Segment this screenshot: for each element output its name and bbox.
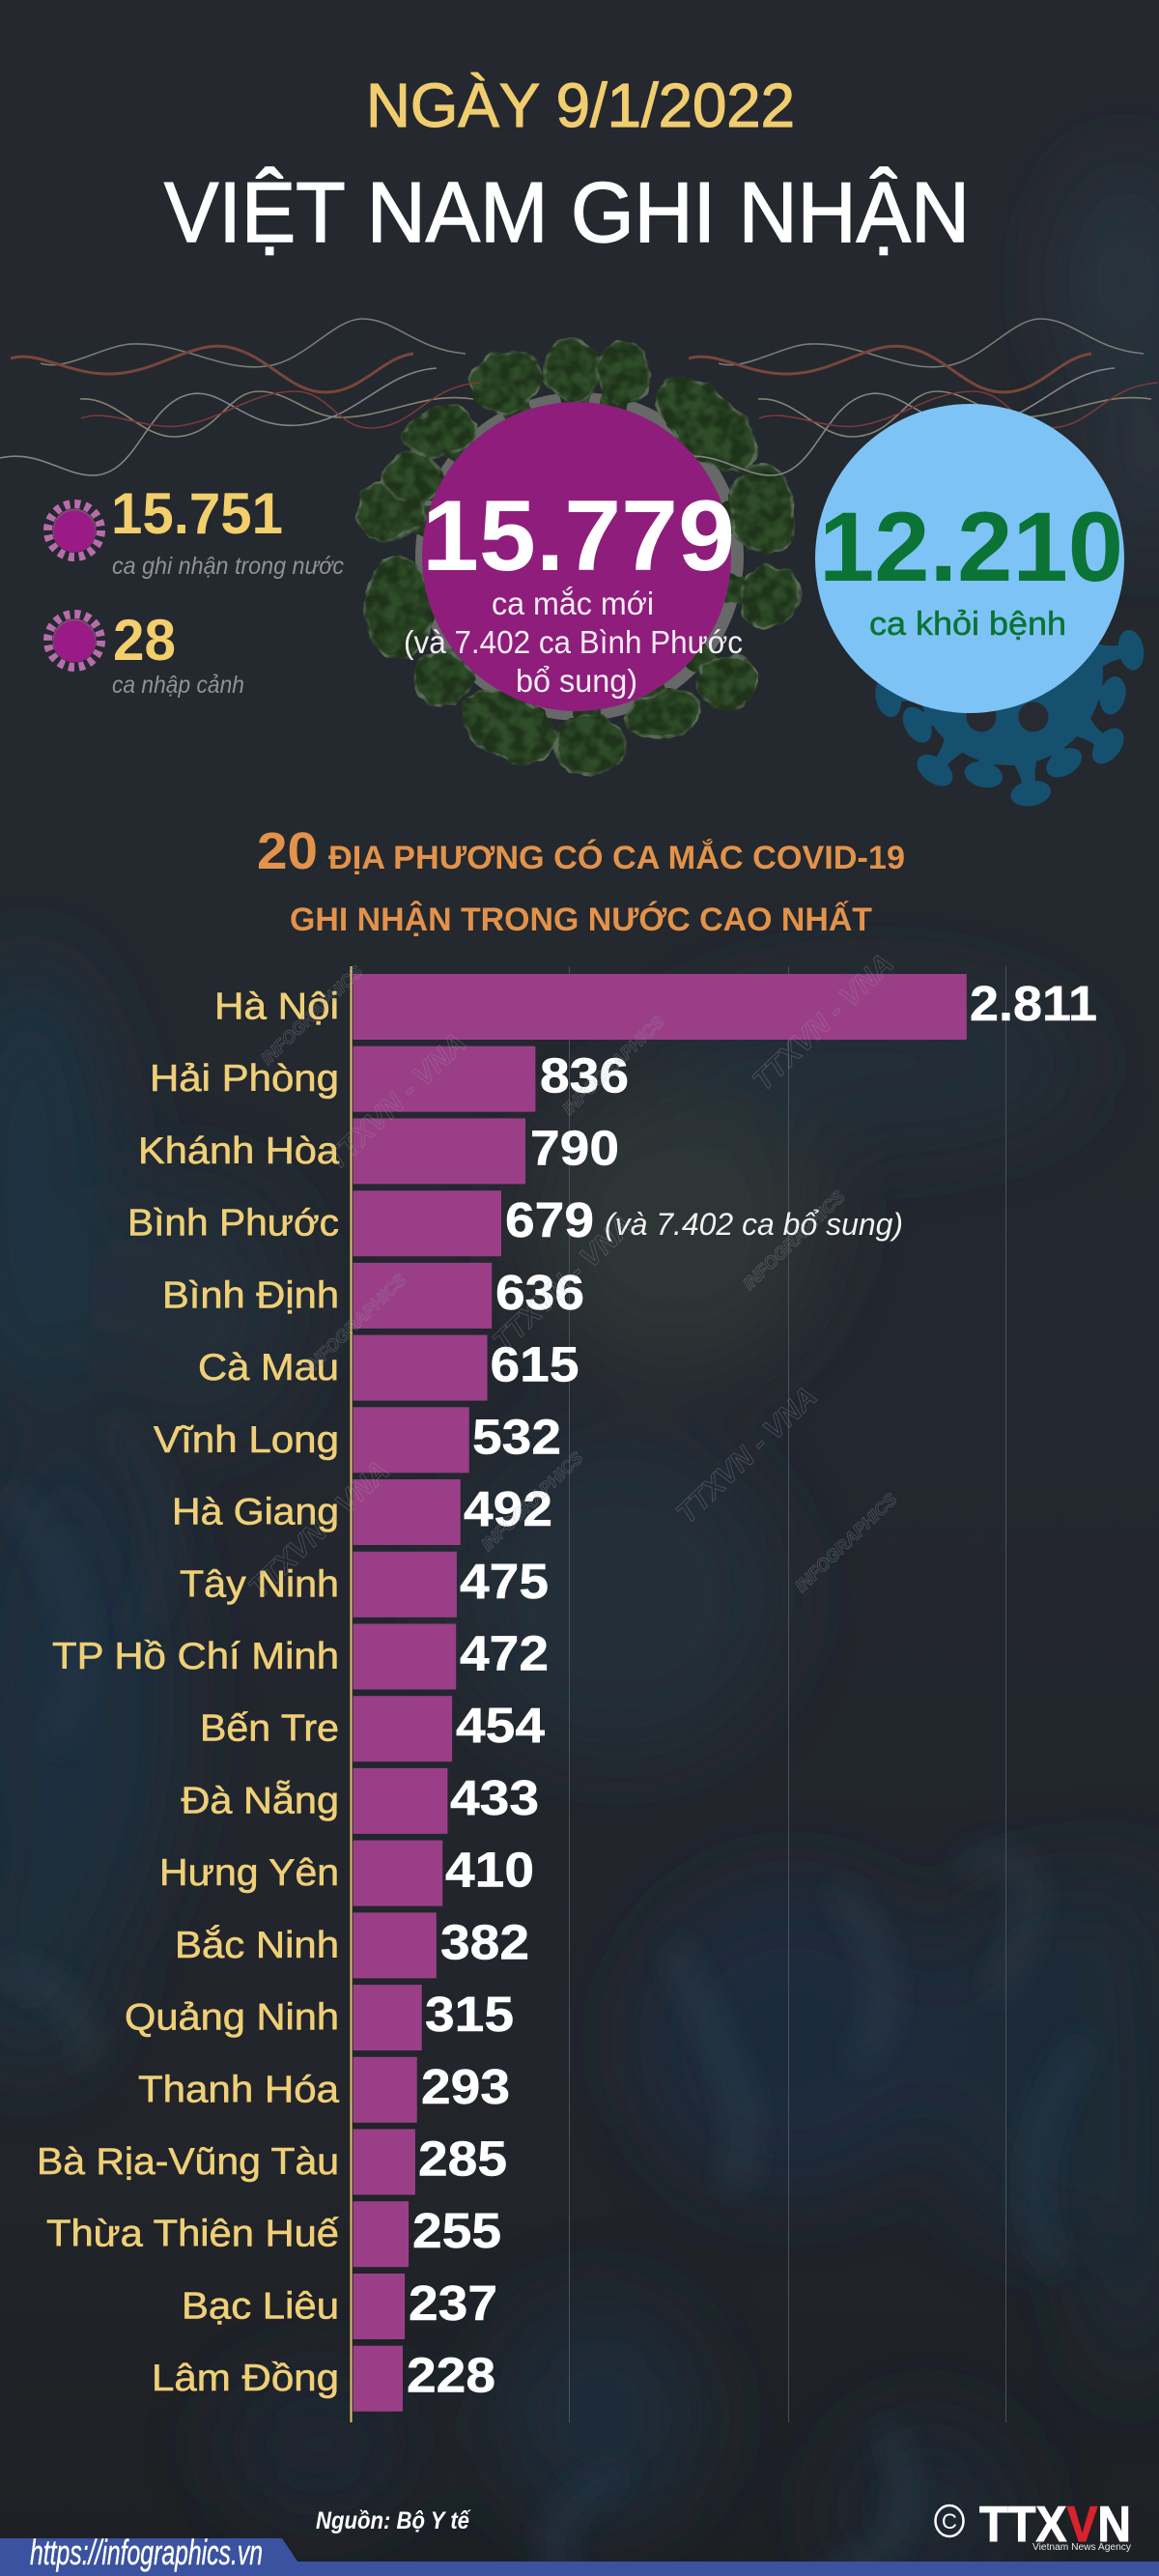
- side stat: imported cases: [48, 608, 244, 699]
- bar values: 615: [491, 1337, 580, 1392]
- stat circle: new cases: [404, 402, 743, 711]
- watermarks: TTXVN - VNA: [747, 948, 900, 1097]
- row labels: Hưng Yên: [159, 1852, 339, 1894]
- illustration: green coronavirus: [356, 339, 799, 777]
- logo: TTXVN: Vietnam News Agency: [1032, 2542, 1131, 2553]
- logo: TTXVN: TTXVN: [979, 2497, 1131, 2553]
- bar values: 636: [495, 1265, 584, 1320]
- section heading: ĐỊA PHƯƠNG CÓ CA MẮC COVID-19: [328, 840, 905, 876]
- bar values: 2.811: [970, 976, 1097, 1031]
- bar values: 454: [456, 1698, 546, 1753]
- row labels: Tây Ninh: [180, 1563, 339, 1605]
- bar values: 472: [460, 1625, 549, 1681]
- bar values: 790: [530, 1120, 619, 1175]
- watermarks: TTXVN - VNA: [487, 1209, 640, 1358]
- bar values: 492: [464, 1481, 552, 1536]
- bar values: 315: [425, 1987, 514, 2042]
- bar values: 410: [445, 1843, 534, 1898]
- row labels: Bạc Liêu: [182, 2286, 339, 2327]
- icon: small virus: [48, 615, 100, 667]
- note: Bình Phước additional cases: (và 7.402 ca bổ sung): [605, 1207, 903, 1242]
- watermarks: TTXVN - VNA: [242, 1455, 396, 1604]
- title: main: VIỆT NAM GHI NHẬN: [164, 164, 970, 260]
- bar values: [407, 976, 1097, 2403]
- bar values: 475: [460, 1554, 549, 1609]
- stat circle: recovered: [815, 404, 1124, 713]
- section heading: GHI NHẬN TRONG NƯỚC CAO NHẤT: [290, 902, 872, 938]
- bar values: 836: [540, 1048, 629, 1103]
- row labels: TP Hồ Chí Minh: [52, 1636, 339, 1677]
- watermarks: TTXVN - VNA: [670, 1381, 824, 1530]
- bar values: 293: [421, 2059, 510, 2114]
- section heading: [257, 822, 905, 938]
- bar chart: 20 localities: [37, 966, 1097, 2422]
- chart grid lines: [570, 966, 1006, 2422]
- side stat: domestic cases: [48, 481, 344, 580]
- bar values: 285: [418, 2132, 507, 2186]
- row labels: Bình Định: [162, 1274, 339, 1316]
- footer bar with url: [0, 2533, 1159, 2576]
- caption: new cases: bổ sung): [516, 664, 637, 700]
- row labels: Bà Rịa-Vũng Tàu: [37, 2141, 339, 2183]
- row labels: Bình Phước: [127, 1203, 339, 1245]
- icon: small virus: [48, 504, 100, 557]
- row labels: Vĩnh Long: [154, 1419, 339, 1461]
- watermarks: INFOGRAPHICS: [477, 1448, 586, 1555]
- watermarks: INFOGRAPHICS: [739, 1188, 848, 1294]
- side stat: imported cases: ca nhập cảnh: [112, 672, 244, 699]
- row labels: Lâm Đồng: [152, 2358, 339, 2399]
- caption: new cases: (và 7.402 ca Bình Phước: [404, 625, 743, 661]
- row labels: Thanh Hóa: [138, 2069, 339, 2110]
- watermarks: [242, 948, 900, 1604]
- bar values: 382: [440, 1914, 529, 1969]
- row labels: Cà Mau: [198, 1347, 339, 1388]
- illustration: blue coronavirus: [872, 578, 1147, 810]
- decorative wave lines: [0, 319, 1158, 475]
- watermarks: INFOGRAPHICS: [558, 1013, 667, 1119]
- watermarks: INFOGRAPHICS: [791, 1490, 900, 1596]
- bar values: 532: [472, 1409, 561, 1464]
- caption: new cases: [404, 586, 743, 700]
- row labels: Hà Giang: [172, 1492, 339, 1532]
- row labels: Khánh Hòa: [138, 1131, 339, 1172]
- section heading: 20: [257, 822, 318, 880]
- caption: recovered: ca khỏi bệnh: [869, 606, 1066, 643]
- bar values: 679: [505, 1192, 594, 1247]
- watermarks: INFOGRAPHICS: [257, 962, 366, 1069]
- bar values: 237: [409, 2275, 497, 2331]
- bar values: 228: [407, 2348, 495, 2403]
- row labels: Hải Phòng: [150, 1058, 339, 1100]
- side stat: domestic cases: ca ghi nhận trong nước: [112, 553, 344, 580]
- bar values: 433: [450, 1770, 539, 1825]
- row labels: Quảng Ninh: [125, 1997, 339, 2039]
- row labels: Bắc Ninh: [175, 1925, 339, 1966]
- caption: new cases: ca mắc mới: [492, 586, 654, 622]
- row labels: Thừa Thiên Huế: [46, 2214, 339, 2255]
- row labels: [37, 986, 339, 2399]
- side stat: imported cases: 28: [113, 608, 176, 673]
- source note: Nguồn: Bộ Y tế: [316, 2507, 471, 2534]
- row labels: Bến Tre: [200, 1708, 339, 1750]
- number: 15.779: 15.779: [422, 480, 735, 592]
- watermarks: TTXVN - VNA: [320, 1027, 473, 1176]
- number: 12.210: 12.210: [819, 492, 1123, 602]
- bar values: 255: [412, 2203, 501, 2258]
- watermarks: INFOGRAPHICS: [300, 1271, 410, 1377]
- row labels: Đà Nẵng: [182, 1779, 339, 1821]
- footer bar with url: https://infographics.vn: [30, 2533, 263, 2572]
- title: date: NGÀY 9/1/2022: [366, 71, 795, 140]
- logo: TTXVN: C: [942, 2509, 957, 2533]
- row labels: Hà Nội: [214, 986, 339, 1028]
- side stat: domestic cases: 15.751: [111, 481, 283, 546]
